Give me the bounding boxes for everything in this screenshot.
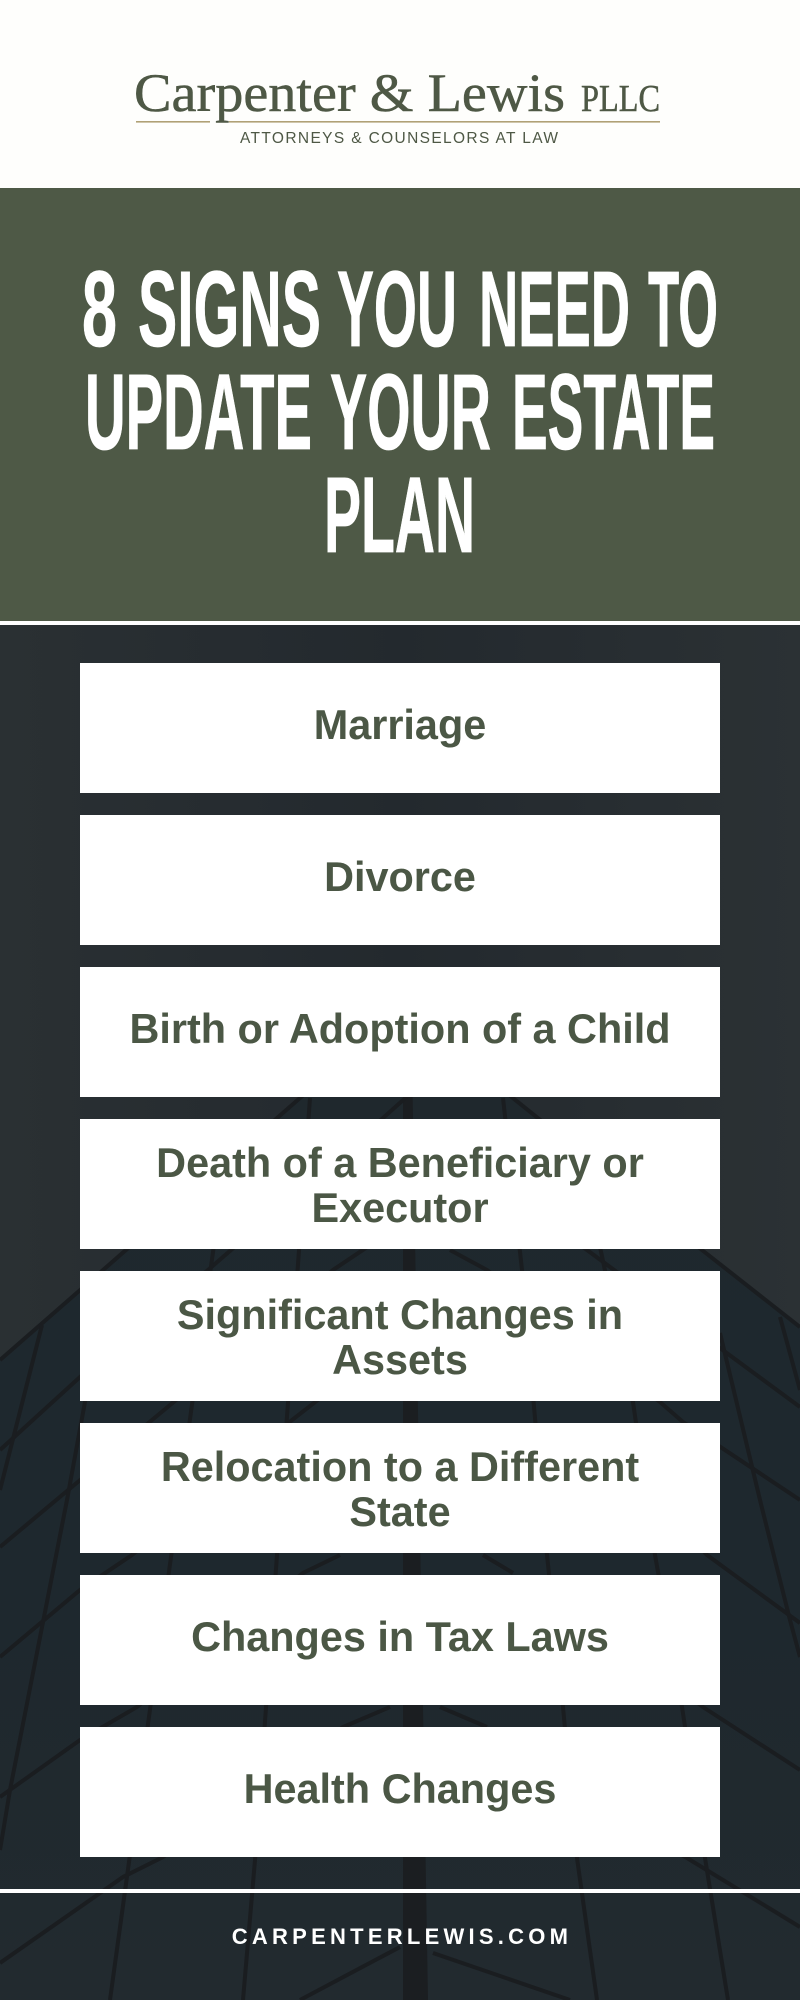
item: Relocation to a Different State: Relocation to a Different: [161, 1444, 639, 1490]
divider: white line under banner: [0, 621, 800, 625]
item: Significant Changes in Assets: Assets: [332, 1337, 468, 1383]
title heading: [82, 248, 718, 575]
logo: Carpenter & Lewis PLLC: Carpenter & Lewis: [134, 63, 565, 123]
title heading: TO: [648, 248, 718, 369]
item: Health Changes: Health Changes: [244, 1766, 556, 1812]
logo: Carpenter & Lewis PLLC: [134, 63, 660, 147]
item: Health Changes: [80, 1727, 720, 1857]
item: Significant Changes in Assets: [80, 1271, 720, 1401]
title heading: NEED: [479, 248, 630, 369]
item: Death of a Beneficiary or Executor: Executor: [311, 1185, 489, 1231]
item: Death of a Beneficiary or Executor: [80, 1119, 720, 1249]
footer website: CARPENTERLEWIS.COM: [232, 1924, 572, 1949]
item: Divorce: [80, 815, 720, 945]
item: Death of a Beneficiary or Executor: Death of a Beneficiary or: [156, 1140, 644, 1186]
logo: Carpenter & Lewis PLLC: ATTORNEYS & COUNSELORS AT LAW: [240, 130, 558, 147]
title banner: [0, 188, 800, 621]
item: Changes in Tax Laws: [80, 1575, 720, 1705]
title heading: YOU: [337, 248, 457, 369]
item: Divorce: Divorce: [324, 854, 476, 900]
item: Birth or Adoption of a Child: [80, 967, 720, 1097]
title heading: UPDATE: [85, 351, 312, 472]
item: Marriage: [80, 663, 720, 793]
item: Relocation to a Different State: [80, 1423, 720, 1553]
item: Changes in Tax Laws: Changes in Tax Laws: [191, 1614, 609, 1660]
title heading: YOUR: [330, 351, 491, 472]
logo: Carpenter & Lewis PLLC: PLLC: [581, 78, 660, 120]
title heading: 8: [82, 248, 117, 369]
title heading: PLAN: [324, 454, 475, 575]
background: dark building facade: [0, 625, 800, 2000]
item: Relocation to a Different State: State: [349, 1489, 451, 1535]
logo header panel: [0, 0, 800, 188]
divider: white line above footer: [0, 1889, 800, 1893]
item: Birth or Adoption of a Child: Birth or Adoption of a Child: [129, 1006, 671, 1052]
item: Marriage: Marriage: [314, 702, 486, 748]
title heading: SIGNS: [138, 248, 321, 369]
item: Significant Changes in Assets: Significant Changes in: [177, 1292, 623, 1338]
